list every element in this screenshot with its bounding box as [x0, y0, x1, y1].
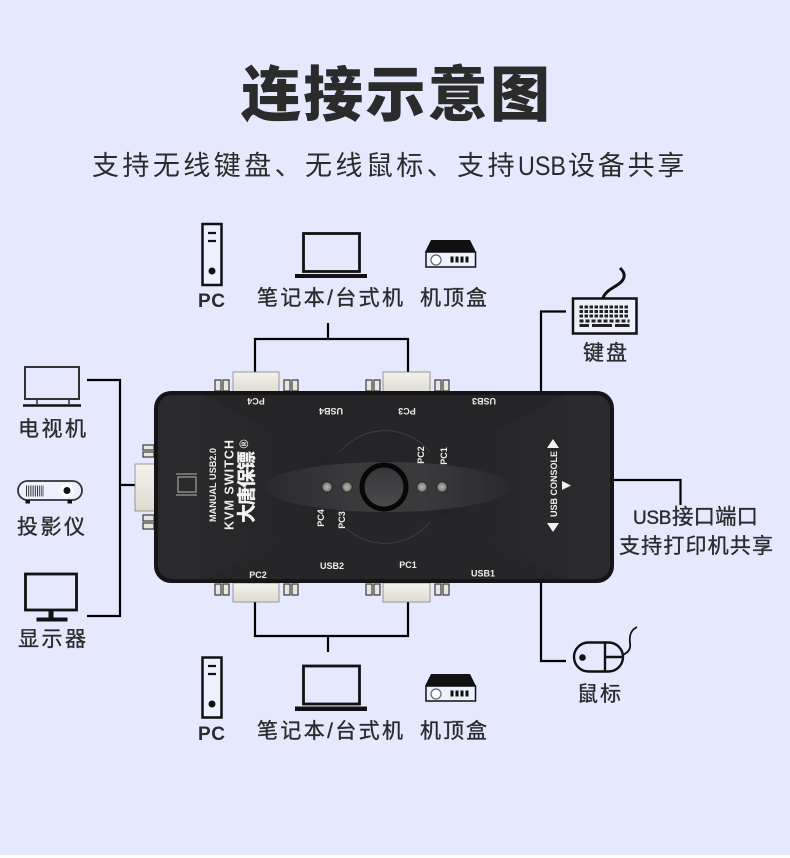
label: PC top: PC: [198, 291, 225, 312]
icon: set-top box bottom: [425, 674, 476, 701]
brand text: 大唐保镖: [235, 451, 258, 523]
VGA connectors: [135, 372, 449, 602]
port labels: [247, 396, 496, 580]
label: USB port: 接口端口: [672, 505, 758, 529]
title: 连接示意图: [241, 62, 550, 129]
subtitle: 支持无线键盘、无线鼠标、支持: [92, 151, 518, 181]
brand text: MANUAL USB2.0: [208, 448, 218, 522]
icon: PC bottom: [202, 658, 222, 718]
icon: PC top: [202, 224, 222, 285]
KVM switch device: [154, 391, 614, 583]
port labels: USB1: [471, 568, 495, 578]
label: projector: 投影仪: [17, 516, 85, 539]
label: printer sharing: 支持打印机共享: [619, 535, 773, 558]
port labels: PC4: [316, 509, 326, 527]
icon: laptop top: [295, 234, 367, 278]
brand text: KVM SWITCH: [222, 440, 236, 530]
port labels: PC3: [337, 511, 347, 529]
icon: mouse: [574, 627, 637, 672]
subtitle: end: 设备共享: [568, 151, 687, 181]
port labels: USB4: [319, 406, 343, 416]
icon: monitor: [26, 574, 76, 622]
centre ellipse: [264, 462, 510, 512]
subtitle: USB: USB: [518, 151, 566, 181]
label: set-top box bottom: 机顶盒: [420, 720, 487, 743]
port labels: PC2: [249, 570, 267, 580]
label: USB port: USB: [633, 508, 671, 529]
label: set-top box top: 机顶盒: [420, 287, 487, 310]
icon: set-top box top: [425, 240, 476, 267]
label: keyboard: 键盘: [583, 342, 627, 365]
port labels: USB3: [472, 396, 496, 406]
port labels: PC1: [399, 560, 417, 570]
label: laptop top: 笔记本/台式机: [257, 287, 403, 310]
brand text: ®: [237, 439, 251, 448]
connection lines: [87, 312, 680, 661]
icon: TV: [23, 367, 81, 406]
port labels: USB2: [320, 561, 344, 571]
icon: keyboard: [573, 268, 636, 334]
LEDs: [322, 482, 448, 492]
label: mouse: 鼠标: [577, 683, 621, 706]
brand text: [208, 439, 258, 530]
device logo icon: [176, 474, 197, 495]
port labels: PC2: [416, 446, 426, 464]
label: laptop bottom: 笔记本/台式机: [257, 720, 403, 743]
icon: projector: [18, 481, 82, 504]
switch button: [360, 462, 408, 512]
port labels: PC3: [398, 406, 416, 416]
port labels: PC1: [439, 447, 449, 465]
USB console marking: USB CONSOLE: [549, 451, 559, 517]
label: TV: 电视机: [18, 418, 86, 441]
USB console marking: [547, 439, 571, 532]
label: PC bottom: PC: [198, 724, 225, 745]
icon: laptop bottom: [295, 666, 367, 711]
label: monitor: 显示器: [18, 628, 86, 651]
port labels: PC4: [247, 396, 265, 406]
